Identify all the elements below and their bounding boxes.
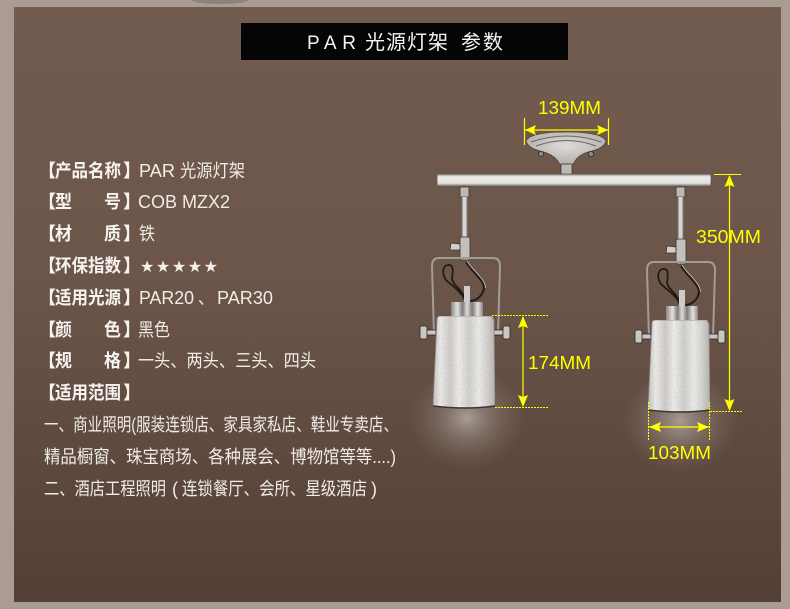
dimension 103MM (648, 402, 711, 463)
stem right (666, 187, 686, 264)
lamp right (635, 262, 725, 412)
spec: scope heading: 】 (123, 383, 141, 403)
scope line 1: 一、商业照明(服装连锁店、家具家私店、鞋业专卖店、 (44, 415, 398, 435)
spec: product name: PAR (139, 161, 175, 181)
scope line 3: ) (371, 479, 377, 499)
spec: colour (38, 320, 170, 340)
title bar: PAR (307, 33, 356, 54)
dimension 174MM: 174MM (528, 353, 591, 373)
spec: material (38, 223, 155, 244)
spec: eco rating: ★★★★★ (140, 257, 218, 276)
spec: light source (38, 288, 273, 308)
title bar: 参数 (461, 31, 503, 54)
spec: model: COB MZX2 (138, 192, 230, 212)
spec: product name: 产品名称 (55, 161, 121, 181)
spec: colour: 颜 (55, 320, 72, 340)
spec: model: 【 (38, 192, 56, 212)
scope line 3: 二、酒店工程照明 (44, 479, 166, 499)
spec: material: 材 (55, 224, 72, 244)
spec: light source: 、 (198, 288, 214, 308)
scope line 3: 连锁餐厅、会所、星级酒店 (182, 479, 367, 499)
light glow right (622, 369, 738, 473)
spec: light source: PAR20 (139, 288, 194, 308)
scope line 3 (44, 479, 377, 499)
light fixture illustration (409, 132, 738, 473)
spec: material: 质 (104, 223, 121, 244)
spec: colour: 【 (38, 320, 56, 340)
lamp left (420, 258, 510, 408)
spec: light source: 】 (123, 288, 141, 308)
dimension 139MM (524, 98, 608, 145)
spec: model: 号 (104, 192, 121, 212)
dimension 350MM (696, 174, 761, 412)
stem left (450, 187, 470, 260)
dimension 350MM: 350MM (696, 227, 761, 247)
spec: eco rating: 【 (38, 256, 56, 276)
spec: product name: 光源灯架 (180, 161, 245, 181)
spec: sizes: 【 (38, 351, 56, 371)
spec: scope heading: 适用范围 (55, 383, 121, 403)
dimension 139MM: 139MM (538, 98, 601, 118)
spec: light source: PAR30 (217, 288, 273, 308)
spec: model (38, 192, 230, 212)
spec: product name: 】 (123, 161, 141, 181)
spec: colour: 黑色 (138, 320, 170, 340)
spec: scope heading (38, 383, 141, 403)
title bar (241, 23, 568, 60)
scope line 3: ( (172, 479, 178, 499)
spec: sizes: 规 (55, 351, 72, 371)
dimension 103MM: 103MM (648, 443, 711, 463)
dimension 174MM (492, 316, 591, 408)
spec: light source: 适用光源 (55, 288, 121, 308)
title bar: 光源灯架 (365, 31, 448, 54)
top edge bump (192, 0, 248, 4)
spec: model: 型 (55, 192, 72, 212)
spec: material: 】 (123, 224, 141, 244)
spec: light source: 【 (38, 288, 56, 308)
spec: colour: 色 (104, 320, 121, 340)
spec: material: 铁 (139, 224, 155, 244)
spec: sizes: 】 (123, 351, 141, 371)
spec: colour: 】 (123, 320, 141, 340)
specification list (38, 161, 398, 499)
spec: eco rating: 环保指数 (55, 255, 121, 276)
spec: eco rating: 】 (123, 256, 141, 276)
spec: sizes: 格 (104, 351, 121, 371)
light glow left (409, 366, 525, 470)
spec: material: 【 (38, 224, 56, 244)
horizontal bar (437, 174, 711, 187)
ceiling canopy (526, 132, 606, 175)
spec: product name: 【 (38, 161, 56, 181)
spec: product name (38, 161, 245, 181)
spec: sizes: 一头、两头、三头、四头 (138, 351, 316, 371)
spec: scope heading: 【 (38, 383, 56, 403)
spec: model: 】 (123, 192, 141, 212)
spec: sizes (38, 351, 316, 371)
scope line 2: 精品橱窗、珠宝商场、各种展会、博物馆等等....) (44, 447, 396, 467)
spec: eco rating (38, 255, 218, 276)
